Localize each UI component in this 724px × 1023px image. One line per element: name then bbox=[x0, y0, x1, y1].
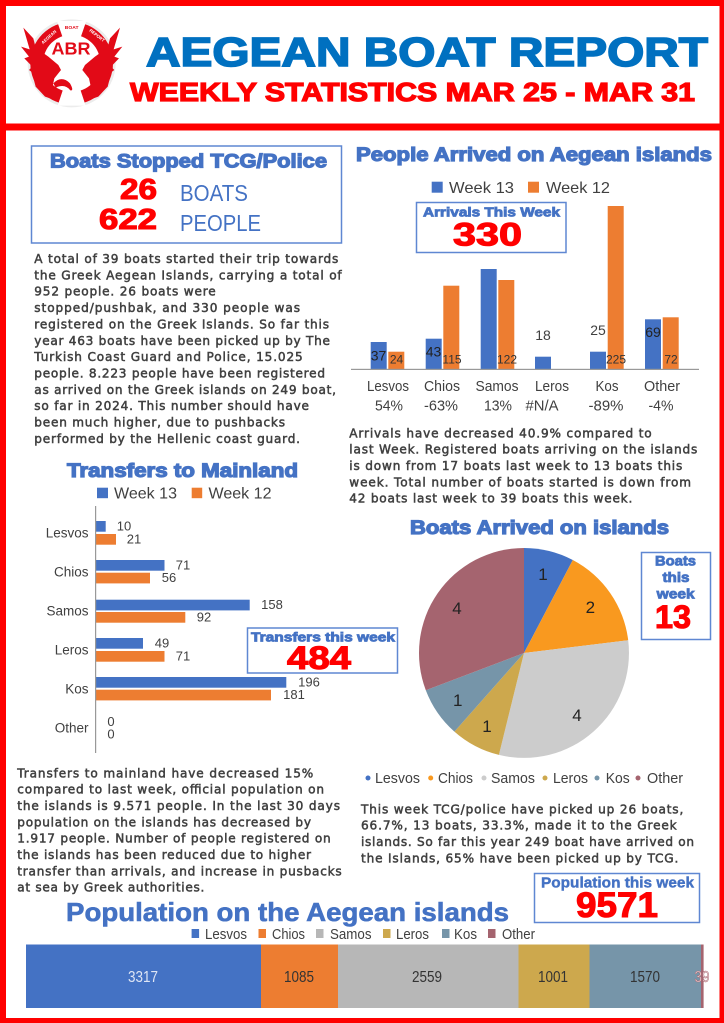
text block: transfers summary: population on the islands has decreased by bbox=[17, 815, 311, 829]
bar chart: arrivals: 24 bbox=[390, 352, 403, 366]
pie chart: boats by island: 1 bbox=[482, 717, 492, 736]
heading: transfers: Transfers to Mainland bbox=[67, 461, 298, 482]
stacked bar: population by island: 1570 bbox=[630, 969, 660, 986]
panel: population bbox=[26, 874, 710, 1008]
legend: islands: Leros bbox=[396, 926, 429, 943]
text block: weekly summary: performed by the Hellenic coast guard. bbox=[34, 432, 300, 446]
bar chart: arrivals: 69 bbox=[645, 324, 661, 340]
callout: arrivals this week bbox=[416, 202, 566, 252]
legend: islands: Chios bbox=[438, 771, 473, 787]
text block: weekly summary: Turkish Coast Guard and Police, 15.025 bbox=[33, 350, 303, 364]
bar chart: transfers: 10 bbox=[117, 518, 131, 534]
callout: transfers this week: Transfers this week bbox=[251, 630, 396, 644]
heading: boats arrived: Boats Arrived on islands bbox=[410, 518, 669, 539]
panel: transfers to mainland bbox=[46, 461, 398, 753]
bar chart: arrivals bbox=[351, 206, 699, 414]
bar chart: transfers: 181 bbox=[283, 687, 305, 702]
legend: islands: Samos bbox=[491, 771, 535, 787]
bar chart: arrivals: 72 bbox=[664, 352, 678, 366]
bar chart: arrivals: 37 bbox=[371, 348, 386, 364]
label: people: PEOPLE bbox=[180, 210, 261, 236]
text block: arrivals summary: week. Total number of boats started is down from bbox=[349, 475, 691, 489]
pie chart: boats by island: 4 bbox=[452, 599, 462, 618]
heading: people arrived: People Arrived on Aegean islands bbox=[356, 145, 712, 166]
text block: weekly summary: people. 8.223 people have been registered bbox=[34, 366, 325, 380]
text block: pickups summary: islands. So far this year 249 boat have arrived on bbox=[361, 835, 694, 849]
text block: weekly summary: A total of 39 boats started their trip towards bbox=[34, 252, 338, 266]
text block: arrivals summary: 42 boats last week to 39 boats this week. bbox=[349, 492, 632, 506]
legend: islands: Chios bbox=[272, 926, 305, 943]
legend: islands bbox=[192, 926, 535, 943]
text block: transfers summary: the islands has been reduced due to higher bbox=[17, 848, 311, 862]
bar chart: transfers: 21 bbox=[127, 532, 141, 546]
pie chart: boats by island: 1 bbox=[453, 691, 462, 710]
pie chart: boats by island: 4 bbox=[572, 706, 582, 725]
panel: people arrived bbox=[351, 145, 712, 414]
bar chart: arrivals: Leros bbox=[535, 378, 569, 395]
bar chart: arrivals: 54% bbox=[375, 398, 403, 414]
pie chart: boats by island bbox=[419, 548, 629, 758]
bar chart: transfers: 158 bbox=[261, 597, 283, 612]
label: boats: BOATS bbox=[180, 180, 248, 206]
heading: boats stopped: Boats Stopped TCG/Police bbox=[50, 152, 327, 172]
stacked bar: population by island: 2559 bbox=[412, 969, 442, 986]
bar chart: transfers: 0 bbox=[107, 726, 115, 742]
text block: weekly summary: stopped/pushbak, and 330 people was bbox=[34, 301, 300, 315]
bar chart: transfers: 56 bbox=[162, 570, 176, 585]
icon: ABR logo: AEGEAN bbox=[40, 29, 57, 45]
text block: weekly summary: registered on the Greek Islands. So far this bbox=[34, 317, 329, 331]
callout: boats this week: Boats bbox=[655, 554, 696, 568]
callout: population this week: 9571 bbox=[576, 886, 658, 925]
icon: ABR logo: BOAT bbox=[65, 25, 79, 31]
bar chart: arrivals: 115 bbox=[442, 352, 462, 366]
bar chart: transfers: 71 bbox=[176, 558, 190, 572]
legend: weeks: Week 13 bbox=[449, 180, 514, 197]
icon: ABR logo: REPORT bbox=[88, 28, 106, 43]
bar chart: transfers bbox=[46, 506, 320, 753]
stacked bar: population by island bbox=[26, 944, 710, 1008]
stacked bar: population by island: 39 bbox=[694, 969, 710, 986]
pie chart: boats by island: 2 bbox=[586, 598, 595, 617]
text block: transfers summary: transfer than arrivals, and increase in pusbacks bbox=[17, 864, 342, 878]
bar chart: transfers: Other bbox=[55, 720, 89, 736]
text block: arrivals summary bbox=[349, 426, 697, 506]
callout: transfers this week bbox=[248, 628, 398, 676]
bar chart: arrivals: -63% bbox=[424, 398, 458, 414]
text block: transfers summary: at sea by Greek authorities. bbox=[17, 881, 204, 895]
callout: arrivals this week: Arrivals This Week bbox=[423, 204, 561, 220]
legend: weeks bbox=[97, 486, 272, 502]
number: 622 people: 622 bbox=[99, 204, 157, 236]
callout: population this week: Population this week bbox=[541, 876, 695, 892]
legend: islands: Samos bbox=[330, 926, 372, 943]
bar chart: transfers: 196 bbox=[298, 674, 320, 690]
legend: weeks: Week 13 bbox=[114, 486, 177, 502]
bar chart: arrivals: 13% bbox=[484, 398, 512, 414]
text block: arrivals summary: last Week. Registered boats arriving on the islands bbox=[349, 443, 697, 457]
text block: pickups summary bbox=[360, 802, 694, 865]
number: 26 boats: 26 bbox=[120, 174, 157, 206]
bar chart: transfers: Chios bbox=[54, 564, 89, 580]
header bbox=[21, 19, 708, 107]
legend: islands: Lesvos bbox=[375, 771, 420, 787]
bar chart: arrivals: 225 bbox=[606, 352, 626, 366]
stacked bar: population by island: 3317 bbox=[128, 969, 158, 986]
bar chart: transfers: 92 bbox=[197, 610, 211, 624]
text block: weekly summary: year 463 boats have been picked up by The bbox=[34, 334, 330, 348]
bar chart: arrivals: Lesvos bbox=[367, 378, 409, 395]
legend: islands bbox=[366, 771, 683, 787]
bar chart: transfers: Kos bbox=[65, 682, 89, 696]
bar chart: arrivals: 25 bbox=[590, 322, 606, 338]
legend: islands: Other bbox=[502, 926, 535, 943]
text block: pickups summary: the Islands, 65% have been picked up by TCG. bbox=[361, 851, 678, 865]
callout: transfers this week: 484 bbox=[287, 640, 351, 676]
bar chart: transfers: 71 bbox=[176, 648, 190, 664]
bar chart: transfers: Samos bbox=[46, 604, 89, 618]
text block: transfers summary: compared to last week, official population on bbox=[17, 783, 324, 797]
text block: pickups summary: This week TCG/police have picked up 26 boats, bbox=[360, 802, 683, 816]
text block: arrivals summary: Arrivals have decreased 40.9% compared to bbox=[349, 426, 652, 440]
text block: weekly summary: 952 people. 26 boats were bbox=[34, 285, 216, 299]
text block: transfers summary bbox=[16, 766, 342, 895]
legend: islands: Lesvos bbox=[205, 926, 247, 943]
callout: boats this week: 13 bbox=[655, 599, 691, 635]
legend: islands: Kos bbox=[606, 771, 630, 787]
pie chart: boats by island: 1 bbox=[538, 565, 548, 584]
bar chart: arrivals: 43 bbox=[426, 344, 441, 360]
callout: arrivals this week: 330 bbox=[453, 216, 522, 252]
legend: weeks: Week 12 bbox=[208, 486, 272, 502]
bar chart: transfers: 49 bbox=[155, 636, 169, 650]
bar chart: transfers: 0 bbox=[107, 714, 115, 729]
text block: weekly summary: as arrived on the Greek islands on 249 boat, bbox=[34, 383, 336, 397]
icon: ABR logo: ABR bbox=[52, 38, 90, 58]
title: AEGEAN BOAT REPORT bbox=[146, 29, 708, 75]
bar chart: arrivals: Kos bbox=[596, 378, 618, 395]
heading: population: Population on the Aegean islands bbox=[66, 897, 509, 927]
text block: weekly summary bbox=[33, 252, 342, 446]
bar chart: arrivals: Samos bbox=[476, 378, 518, 395]
bar chart: arrivals: Chios bbox=[424, 378, 460, 395]
text block: weekly summary: so far in 2024. This number should have bbox=[34, 399, 309, 413]
callout: boats this week: week bbox=[656, 586, 695, 602]
stacked bar: population by island: 1001 bbox=[538, 969, 568, 986]
panel: boats arrived bbox=[366, 518, 710, 787]
callout: boats this week bbox=[642, 552, 710, 640]
bar chart: arrivals: Other bbox=[644, 378, 680, 395]
legend: weeks bbox=[432, 180, 610, 197]
subtitle: WEEKLY STATISTICS MAR 25 - MAR 31 bbox=[130, 79, 695, 107]
legend: islands: Other bbox=[647, 771, 683, 787]
bar chart: arrivals: 18 bbox=[535, 327, 551, 343]
callout: boats this week: this bbox=[662, 570, 690, 585]
text block: weekly summary: the Greek Aegean Islands, carrying a total of bbox=[34, 268, 342, 282]
bar chart: arrivals: -4% bbox=[648, 398, 674, 414]
text block: transfers summary: 1.917 people. Number of people registered on bbox=[17, 832, 331, 846]
bar chart: arrivals: -89% bbox=[588, 398, 624, 414]
text block: transfers summary: the islands is 9.571 people. In the last 30 days bbox=[17, 799, 340, 813]
bar chart: arrivals: #N/A bbox=[526, 398, 558, 414]
panel: boats stopped bbox=[32, 146, 342, 243]
icon: ABR logo bbox=[21, 19, 122, 107]
stacked bar: population by island: 1085 bbox=[284, 969, 314, 986]
text block: weekly summary: been much higher, due to pushbacks bbox=[34, 416, 285, 430]
text block: arrivals summary: is down from 17 boats last week to 13 boats this bbox=[349, 459, 682, 473]
legend: islands: Kos bbox=[454, 926, 477, 943]
text block: pickups summary: 66.7%, 13 boats, 33.3%, made it to the Greek bbox=[361, 819, 677, 833]
text block: transfers summary: Transfers to mainland have decreased 15% bbox=[16, 766, 313, 780]
legend: weeks: Week 12 bbox=[546, 180, 610, 197]
callout: population this week bbox=[534, 874, 700, 925]
bar chart: transfers: Leros bbox=[55, 642, 89, 658]
bar chart: arrivals: 122 bbox=[497, 352, 517, 366]
legend: islands: Leros bbox=[553, 771, 588, 787]
bar chart: transfers: Lesvos bbox=[46, 526, 89, 540]
